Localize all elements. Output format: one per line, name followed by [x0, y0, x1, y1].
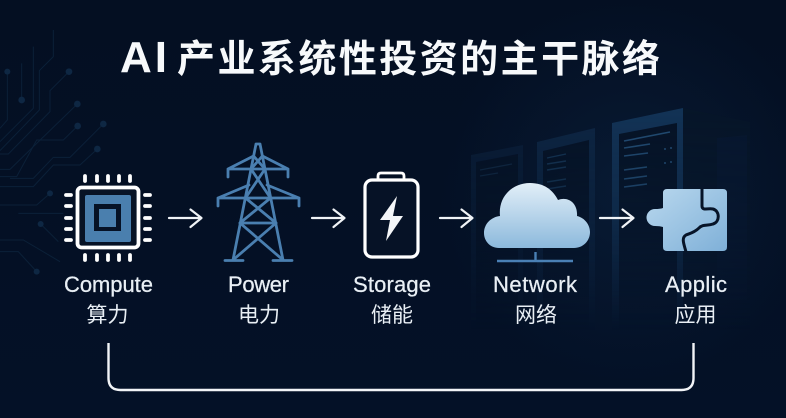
stage: compute [64, 176, 153, 327]
label: power: Power [228, 272, 289, 297]
label: compute: Compute [64, 272, 153, 297]
arrow: network to application [600, 210, 634, 227]
label: storage: 储能 [371, 304, 413, 327]
stage: power [218, 144, 299, 327]
label: compute [64, 272, 153, 327]
background: server racks [471, 108, 683, 294]
icon: transmission tower [218, 144, 299, 260]
label: network: 网络 [515, 304, 557, 327]
label: storage [353, 272, 431, 327]
label: power [228, 272, 289, 327]
stage: network [484, 183, 590, 327]
icon: cloud [484, 183, 590, 261]
icon: chip [66, 176, 150, 260]
arrow: power to storage [312, 210, 344, 227]
icon: puzzle [646, 188, 727, 252]
label: application [665, 272, 727, 327]
label: storage: Storage [353, 272, 431, 297]
label: application: Applic [665, 272, 727, 297]
label: application: 应用 [674, 304, 716, 327]
label: power: 电力 [238, 304, 280, 327]
label: network: Network [493, 272, 578, 297]
stage: application [646, 188, 727, 327]
icon: battery [365, 173, 418, 257]
bracket connecting compute to application [108, 343, 694, 390]
title: AI [120, 33, 167, 82]
arrow: storage to network [440, 210, 472, 227]
label: network [493, 272, 578, 327]
label: compute: 算力 [86, 304, 128, 327]
background: circuit traces [0, 30, 107, 275]
arrow: compute to power [169, 210, 202, 227]
stage: storage [353, 173, 431, 327]
title: 产业系统性投资的主干脉络 [177, 39, 660, 81]
